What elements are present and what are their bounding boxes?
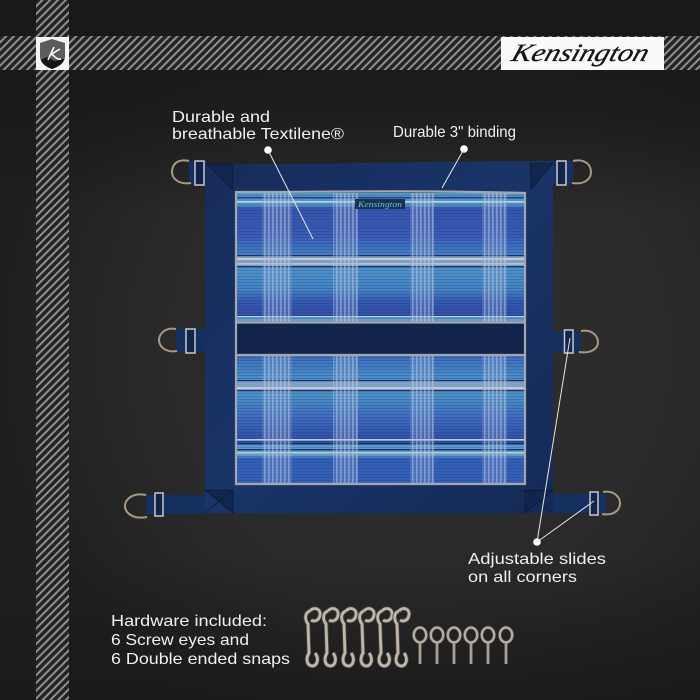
callout: binding [393,124,516,188]
straps and hardware: top left [172,160,207,185]
straps and hardware: middle right [551,330,598,353]
plaid white band [236,255,524,267]
plaid white bands [236,380,524,391]
hardware text [111,613,290,668]
callout: Textilene: breathable Textilene® [172,126,344,143]
callout: slides: Adjustable slides [468,551,606,568]
icon: screw eyes [414,628,512,664]
straps and hardware: top right [551,160,591,185]
Textilene panel: top [236,193,524,322]
corner gussets [205,163,553,513]
hardware text: 6 Double ended snaps [111,651,290,668]
navy centre band [236,323,524,355]
straps and hardware: bottom right [551,492,620,515]
navy binding [205,161,553,513]
plaid vertical stripes [262,356,292,484]
stall guard product [125,160,620,518]
callout: slides [468,338,606,586]
icon: Kensington shield logo [36,37,69,70]
Textilene panel: bottom [236,356,524,484]
straps and hardware: bottom left [125,493,207,518]
logo: Kensington wordmark [501,37,664,70]
logo: Kensington wordmark: Kensington [507,39,653,67]
hardware text: Hardware included: [111,613,267,630]
callout: Textilene: Durable and [172,109,270,126]
grey panel piping [236,191,525,484]
sewn label [355,199,405,209]
icon: double ended snaps [306,608,409,666]
sewn label: Kensington [357,200,402,209]
plaid vertical stripes [262,193,292,322]
straps and hardware: middle left [159,329,207,353]
callout: binding: Durable 3" binding [393,124,516,141]
callout: slides: on all corners [468,569,577,586]
hardware text: 6 Screw eyes and [111,632,249,649]
callout: Textilene [172,109,344,239]
